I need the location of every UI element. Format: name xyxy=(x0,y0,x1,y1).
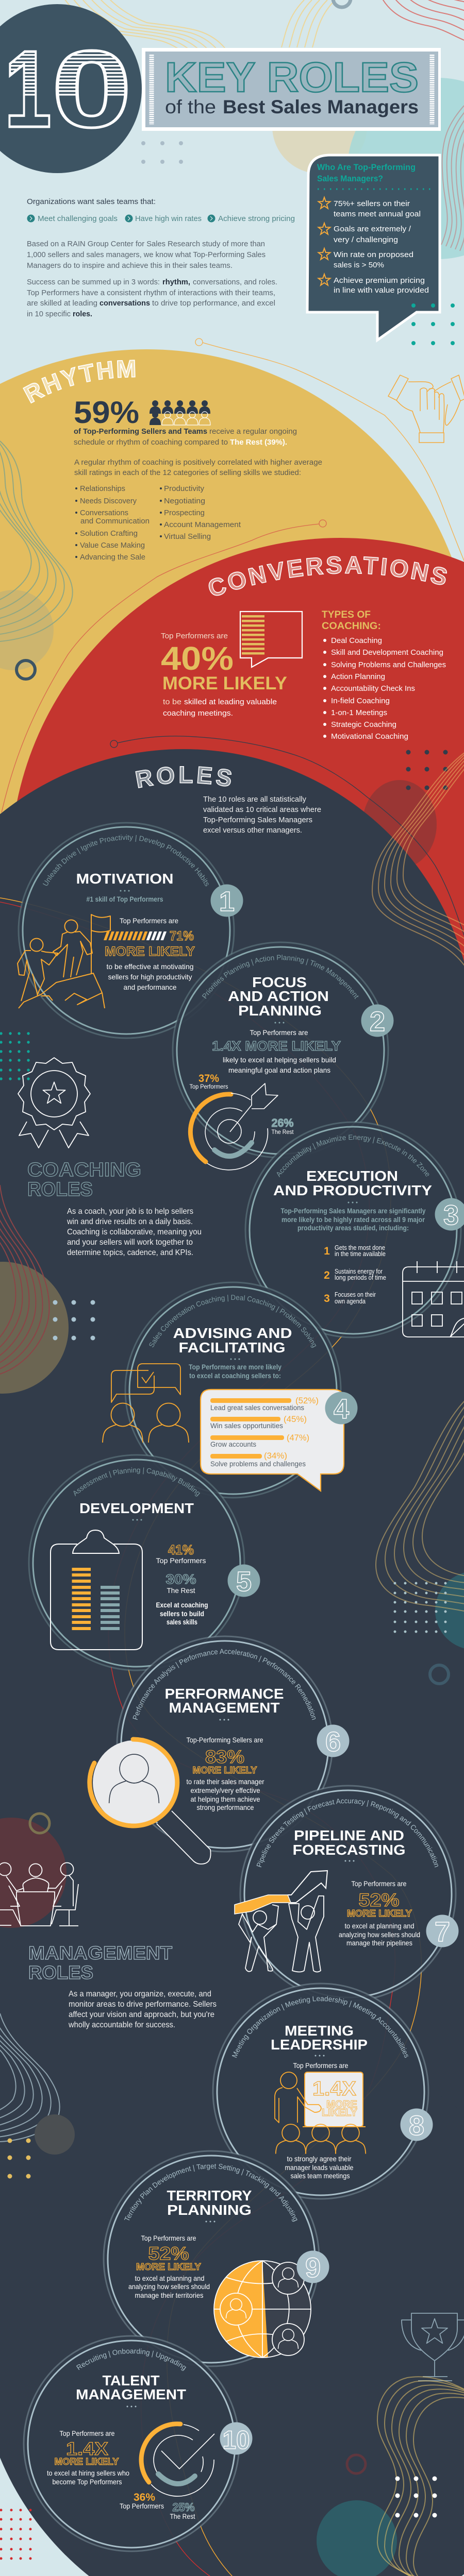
icon: presenter at board with audience: MORE xyxy=(326,2099,357,2110)
management roles heading and text: monitor areas to drive performance. Sellers xyxy=(69,2000,217,2009)
badge 3 xyxy=(435,1198,464,1231)
role 7: pipeline and forecasting: analyzing how sellers should xyxy=(339,1930,420,1939)
role 2: focus and action planning: The Rest xyxy=(271,1128,294,1136)
management roles heading and text: As a manager, you organize, execute, and xyxy=(69,1990,211,1998)
coaching roles heading and text xyxy=(27,1159,202,1257)
role 5: development: The Rest xyxy=(167,1586,195,1595)
types of coaching list: Accountability Check Ins xyxy=(331,684,415,693)
conversations statistic 40%: MORE LIKELY xyxy=(162,673,287,693)
badge 6 xyxy=(317,1725,350,1757)
role 3: execution and productivity xyxy=(273,1134,464,1337)
role 10: talent management: 1.4X xyxy=(66,2439,109,2459)
conversations statistic 40%: Top Performers are xyxy=(161,632,228,640)
roles heading and intro: excel versus other managers. xyxy=(203,826,302,835)
intro text: Have high win rates xyxy=(135,214,202,223)
icon: calendar xyxy=(403,1261,464,1337)
rhythm text and skill lists: Account Management xyxy=(164,520,241,529)
types of coaching list: Action Planning xyxy=(331,672,385,681)
role 9: territory planning xyxy=(124,2164,329,2358)
icon: half orange globe with people xyxy=(214,2261,311,2358)
management roles heading and text: ROLES xyxy=(28,1962,93,1983)
rhythm text and skill lists: Prospecting xyxy=(164,509,205,517)
conversations section background xyxy=(10,538,464,1197)
role 6: performance management: at helping them achieve xyxy=(191,1795,260,1803)
icon: clasped hands xyxy=(388,375,464,443)
role 7: pipeline and forecasting: Pipeline Stress Testing | Forecast Accuracy | Reporting and Communication xyxy=(257,1799,438,1867)
role 2: focus and action planning: Top Performers xyxy=(190,1083,228,1090)
role 3: execution and productivity: Accountability | Maximize Energy | Execute in the Zone xyxy=(276,1134,429,1177)
badge 9 xyxy=(297,2250,329,2283)
role 5: development: Top Performers xyxy=(156,1556,206,1565)
role 6: performance management: Top-Performing Sellers are xyxy=(187,1736,263,1744)
callout: who are top-performing sales managers: sales is > 50% xyxy=(334,261,384,269)
bottom left decoration: red dots, blob and wave xyxy=(0,2509,44,2576)
role 6: performance management: extremely/very effective xyxy=(191,1786,260,1794)
role 4: advising and facilitating: ADVISING AND xyxy=(173,1325,292,1341)
role 4: advising and facilitating: Top Performers are more likely xyxy=(189,1363,281,1371)
types of coaching list: 1-on-1 Meetings xyxy=(331,708,387,717)
management roles heading and text xyxy=(28,1942,217,2029)
icon: clipboard bar chart xyxy=(51,1530,142,1650)
role 7: pipeline and forecasting: PIPELINE AND xyxy=(294,1827,404,1843)
roles heading and intro xyxy=(135,766,321,835)
role 8: meeting leadership xyxy=(232,1996,433,2180)
conversations heading: CONVERSATIONS xyxy=(208,556,447,596)
role 10: talent management: 25% xyxy=(172,2501,195,2514)
panel: coaching bars speech bubble: (45%) xyxy=(284,1414,307,1424)
icon: two people holding rising arrow xyxy=(235,1871,327,1972)
panel: coaching bars speech bubble: Solve problems and challenges xyxy=(210,1460,306,1468)
roles section background xyxy=(0,749,464,2576)
olive wave and blob on rhythm panel xyxy=(0,410,73,679)
role 5: development: Excel at coaching xyxy=(156,1601,208,1609)
role 9: territory planning: PLANNING xyxy=(167,2202,252,2218)
rhythm text and skill lists: Conversations xyxy=(80,509,128,517)
callout: who are top-performing sales managers: Win rate on proposed xyxy=(334,250,413,259)
intro text: roles. xyxy=(73,310,92,318)
icon: presenter at board with audience xyxy=(275,2072,366,2154)
coaching roles heading and text: Coaching is collaborative, meaning you xyxy=(67,1228,202,1236)
rhythm statistic 59%: schedule or rhythm of coaching compared to xyxy=(74,438,228,447)
icon: award medal xyxy=(18,1058,90,1148)
icon: climbers with flag xyxy=(18,914,110,1008)
icon: magnifier with person xyxy=(90,1739,211,1864)
panel: coaching bars speech bubble: (34%) xyxy=(264,1451,287,1461)
roles heading and intro: validated as 10 critical areas where xyxy=(203,805,321,814)
teal dots xyxy=(411,303,455,345)
role 9: territory planning: 52% xyxy=(148,2244,189,2264)
coaching roles heading and text: win and drive results on a daily basis. xyxy=(67,1217,193,1226)
types of coaching list: Deal Coaching xyxy=(331,636,382,645)
rhythm text and skill lists: Solution Crafting xyxy=(80,529,138,538)
panel: coaching bars speech bubble: (52%) xyxy=(295,1396,319,1405)
rhythm text and skill lists: Needs Discovery xyxy=(80,497,137,505)
rhythm text and skill lists: Value Case Making xyxy=(80,541,145,550)
role 8: meeting leadership: Top Performers are xyxy=(293,2061,349,2070)
management roles heading and text: MANAGEMENT xyxy=(28,1942,172,1963)
role 2: focus and action planning: meaningful goal and action plans xyxy=(228,1066,330,1074)
badge 4 xyxy=(325,1392,358,1425)
badge 3: 3 xyxy=(443,1200,459,1231)
role 2: focus and action planning: FOCUS xyxy=(252,974,307,990)
chart: 71% hatched bar xyxy=(104,931,167,940)
types of coaching list: Motivational Coaching xyxy=(331,732,408,741)
types of coaching list: COACHING: xyxy=(322,621,381,632)
role 5: development: 30% xyxy=(166,1571,196,1587)
rhythm text and skill lists: Productivity xyxy=(164,484,204,493)
role 2: focus and action planning: likely to excel at helping sellers build xyxy=(223,1056,336,1064)
rhythm text and skill lists: Negotiating xyxy=(164,497,205,505)
role 5: development: sellers to build xyxy=(160,1610,204,1618)
conversations statistic 40%: 40% xyxy=(161,640,234,677)
callout: who are top-performing sales managers: in line with value provided xyxy=(334,286,429,295)
role 7: pipeline and forecasting xyxy=(234,1799,459,1972)
role 3: execution and productivity: long periods of time xyxy=(335,1274,386,1281)
panel: coaching bars speech bubble: Win sales opportunities xyxy=(210,1421,283,1430)
badge 1 xyxy=(210,884,243,917)
role 8: meeting leadership: to strongly agree their xyxy=(287,2155,352,2163)
role 7: pipeline and forecasting: FORECASTING xyxy=(293,1842,405,1858)
role 2: focus and action planning: Top Performers are xyxy=(250,1028,308,1037)
bottom right decoration: wave, blob, rings and dots xyxy=(317,2377,464,2576)
intro text: to drive top performance, and excel xyxy=(152,299,275,308)
callout: who are top-performing sales managers: Who Are Top-Performing xyxy=(317,162,416,172)
role 2: focus and action planning: 37% xyxy=(198,1073,219,1084)
callout: who are top-performing sales managers: Sales Managers? xyxy=(317,174,383,183)
coaching roles heading and text: ROLES xyxy=(27,1179,93,1200)
intro text: Success can be summed up in 3 words: xyxy=(27,278,160,286)
thin yellow connector arc xyxy=(195,338,464,567)
role 7: pipeline and forecasting: 52% xyxy=(359,1890,399,1910)
role 1: motivation: #1 skill of Top Performers xyxy=(87,895,163,903)
badge 2: 2 xyxy=(370,1006,385,1037)
role 10: talent management: MORE LIKELY xyxy=(55,2456,119,2467)
roles heading and intro: ROLES xyxy=(135,766,232,788)
role 1: motivation: 71% xyxy=(170,929,194,943)
role 10: talent management xyxy=(47,2348,253,2520)
conversations statistic 40% xyxy=(161,632,287,718)
role 1: motivation: sellers for high productivity xyxy=(108,973,192,981)
badge 5 xyxy=(228,1564,260,1597)
role 2: focus and action planning: 1.4X MORE LIKELY xyxy=(212,1038,341,1054)
role 10: talent management: Top Performers are xyxy=(60,2429,115,2437)
intro text: are skilled at leading xyxy=(27,299,97,308)
role 7: pipeline and forecasting: Top Performers are xyxy=(352,1879,407,1888)
role 1: motivation xyxy=(17,835,243,1009)
intro text: Organizations want sales teams that: xyxy=(27,197,156,206)
roles heading and intro: Top-Performing Sales Managers xyxy=(203,816,312,824)
icon: trophy xyxy=(402,2313,464,2381)
intro text: rhythm, xyxy=(162,278,190,286)
rhythm statistic 59%: receive a regular ongoing xyxy=(209,427,297,436)
badge 9: 9 xyxy=(305,2252,321,2283)
big circle with number 10: 0 xyxy=(52,28,132,150)
rhythm text and skill lists: and Communication xyxy=(80,517,150,526)
intro text xyxy=(27,197,295,318)
rhythm text and skill lists xyxy=(74,458,322,562)
thin red connector arc xyxy=(2,520,326,812)
role 3: execution and productivity: 3 xyxy=(324,1293,330,1304)
role 3: execution and productivity: more likely to be highly rated across all 9 major xyxy=(281,1216,425,1224)
role 6: performance management: PERFORMANCE xyxy=(165,1686,284,1702)
role 10: talent management: TALENT xyxy=(102,2372,160,2388)
role 3: execution and productivity: in the time available xyxy=(335,1250,386,1258)
role 6: performance management: to rate their sales manager xyxy=(187,1777,264,1786)
intro text: conversations xyxy=(100,299,150,308)
role 1: motivation: Unleash Drive | Ignite Proactivity | Develop Productive Habits xyxy=(43,835,209,886)
role 9: territory planning: MORE LIKELY xyxy=(136,2262,201,2272)
decorative waves, blobs and dots on roles panel xyxy=(0,736,464,2178)
role 3: execution and productivity: Focuses on their xyxy=(335,1291,376,1298)
callout: who are top-performing sales managers: teams meet annual goal xyxy=(334,210,421,218)
types of coaching list: TYPES OF xyxy=(322,609,371,620)
role 10: talent management: Recruiting | Onboarding | Upgrading xyxy=(76,2348,186,2371)
intro text: Managers do to inspire and achieve this in their sales teams. xyxy=(27,261,233,270)
intro text: Meet challenging goals xyxy=(38,214,118,223)
rhythm statistic 59%: of Top-Performing Sellers and Teams xyxy=(74,427,207,436)
grey dots xyxy=(141,141,183,164)
role 5: development xyxy=(50,1467,260,1650)
role 6: performance management: strong performance xyxy=(197,1803,254,1811)
rhythm statistic 59%: 59% xyxy=(74,395,139,430)
intro text: Achieve strong pricing xyxy=(218,214,295,223)
management roles heading and text: wholly accountable for success. xyxy=(68,2021,175,2029)
role 2: focus and action planning: Priorities Planning | Action Planning | Time Management xyxy=(202,955,359,999)
callout: who are top-performing sales managers: very / challenging xyxy=(334,235,398,244)
rhythm heading: RHYTHM xyxy=(23,360,136,404)
role 1: motivation: and performance xyxy=(124,983,177,991)
rhythm text and skill lists: Virtual Selling xyxy=(164,532,211,541)
rhythm text and skill lists: Advancing the Sale xyxy=(80,553,145,562)
intro text: in 10 specific xyxy=(27,310,71,318)
role 7: pipeline and forecasting: to excel at planning and xyxy=(344,1922,415,1930)
badge 7 xyxy=(426,1914,459,1947)
icon: presenter at board with audience: 1.4X xyxy=(312,2078,356,2100)
role 8: meeting leadership: sales team meetings xyxy=(291,2172,350,2180)
role 3: execution and productivity: 1 xyxy=(324,1245,330,1257)
icon: presenter at board with audience: LIKELY xyxy=(322,2107,358,2119)
conversations statistic 40%: skilled at leading valuable xyxy=(184,698,277,706)
role 1: motivation: to be effective at motivating xyxy=(106,962,194,971)
conversations statistic 40%: coaching meetings. xyxy=(163,709,233,718)
role 10: talent management: MANAGEMENT xyxy=(76,2386,186,2402)
title banner: Best Sales Managers xyxy=(223,96,419,117)
role 9: territory planning: Territory Plan Development | Target Setting | Tracking and Adjusting xyxy=(124,2164,297,2222)
callout: who are top-performing sales managers: Goals are extremely / xyxy=(334,225,411,233)
badge 10: 10 xyxy=(223,2426,250,2454)
role 6: performance management: Performance Analysis | Performance Acceleration | Performance Remediation xyxy=(132,1649,316,1720)
title banner: of the xyxy=(165,96,216,117)
role 9: territory planning: manage their territories xyxy=(135,2291,203,2299)
role 3: execution and productivity: Sustains energy for xyxy=(335,1268,383,1275)
panel: coaching bars speech bubble: Lead great sales conversations xyxy=(210,1403,304,1412)
role 4: advising and facilitating: Sales Conversation Coaching | Deal Coaching | Problem Solving xyxy=(150,1295,317,1348)
intro text: Based on a RAIN Group Center for Sales Research study of more than xyxy=(27,240,265,248)
role 8: meeting leadership: Meeting Organization | Meeting Leadership | Meeting Accountabilities xyxy=(232,1996,408,2058)
role 5: development: Assessment | Planning | Capability Building xyxy=(73,1467,200,1497)
management roles heading and text: affect your vision and approach, but you're xyxy=(69,2010,214,2019)
roles heading and intro: The 10 roles are all statistically xyxy=(203,795,306,804)
types of coaching list xyxy=(322,609,446,741)
rhythm text and skill lists: skill ratings in each of the 12 categories of selling skills we studied: xyxy=(74,468,301,477)
callout: who are top-performing sales managers xyxy=(307,155,440,340)
role 3: execution and productivity: productivity areas studied, including: xyxy=(297,1224,409,1232)
role 10: talent management: Top Performers xyxy=(120,2502,164,2510)
role 3: execution and productivity: 2 xyxy=(324,1269,330,1281)
big circle with number 10: 0 xyxy=(52,28,132,150)
title banner xyxy=(142,48,441,131)
role 10: talent management: to excel at hiring sellers who xyxy=(47,2469,129,2477)
role 2: focus and action planning xyxy=(188,955,394,1171)
role 8: meeting leadership: manager leads valuable xyxy=(285,2163,354,2172)
role 2: focus and action planning: 26% xyxy=(271,1116,294,1129)
coaching roles heading and text: determine topics, cadence, and KPIs. xyxy=(67,1248,193,1257)
panel: coaching bars speech bubble xyxy=(201,1389,344,1491)
role 7: pipeline and forecasting: MORE LIKELY xyxy=(347,1908,412,1919)
types of coaching list: In-field Coaching xyxy=(331,697,390,705)
types of coaching list: Solving Problems and Challenges xyxy=(331,660,446,669)
intro text: 1,000 sellers and sales managers, we know what Top-Performing Sales xyxy=(27,250,266,259)
role 5: development: DEVELOPMENT xyxy=(79,1500,194,1516)
icon: striped speech bubble xyxy=(240,612,302,667)
icon: chat bubbles and two people xyxy=(103,1364,189,1443)
types of coaching list: Strategic Coaching xyxy=(331,720,396,729)
role 10: talent management: become Top Performers xyxy=(53,2478,122,2486)
intro text: conversations, and roles. xyxy=(193,278,277,286)
badge 1: 1 xyxy=(219,886,235,917)
badge 4: 4 xyxy=(334,1394,349,1425)
role 6: performance management: MANAGEMENT xyxy=(169,1700,279,1716)
title banner: KEY ROLES xyxy=(165,54,419,101)
role 10: talent management: The Rest xyxy=(170,2512,195,2520)
role 4: advising and facilitating: to excel at coaching sellers to: xyxy=(189,1371,281,1380)
role 5: development: 41% xyxy=(168,1542,194,1557)
big circle with number 10: 1 xyxy=(4,28,52,150)
icon: target chart xyxy=(190,1083,278,1170)
role 8: meeting leadership: LEADERSHIP xyxy=(271,2037,368,2053)
role rings 1 to 10 xyxy=(19,823,461,2551)
role 10: talent management: 36% xyxy=(134,2492,155,2503)
big circle with number 10 xyxy=(0,4,142,173)
conversations statistic 40%: to be xyxy=(163,698,181,706)
big circle with number 10: 1 xyxy=(4,28,52,150)
long thin orange and red arcs through the roles circles xyxy=(0,897,464,2576)
role 6: performance management: 83% xyxy=(205,1747,244,1767)
coaching roles heading and text: and your sellers will work together to xyxy=(67,1238,193,1247)
role 9: territory planning: Top Performers are xyxy=(141,2234,196,2242)
role 9: territory planning: to excel at planning and xyxy=(135,2274,204,2282)
icon: meeting around table xyxy=(0,1863,78,1926)
rhythm statistic 59% xyxy=(74,395,297,447)
role 1: motivation: Top Performers are xyxy=(120,917,178,925)
role 4: advising and facilitating: FACILITATING xyxy=(178,1340,286,1355)
badge 5: 5 xyxy=(236,1566,252,1597)
rhythm text and skill lists: A regular rhythm of coaching is positively correlated with higher average xyxy=(74,458,322,467)
badge 8 xyxy=(400,2108,433,2141)
badge 7: 7 xyxy=(435,1917,450,1947)
panel: coaching bars speech bubble: (47%) xyxy=(287,1433,309,1443)
role 9: territory planning: TERRITORY xyxy=(167,2188,252,2204)
badge 6: 6 xyxy=(325,1726,341,1757)
role 4: advising and facilitating xyxy=(102,1295,358,1492)
role 7: pipeline and forecasting: manage their pipelines xyxy=(346,1939,412,1947)
coaching roles heading and text: COACHING xyxy=(27,1159,141,1181)
role 6: performance management xyxy=(87,1649,350,1865)
role 8: meeting leadership: MEETING xyxy=(285,2023,354,2039)
role 2: focus and action planning: AND ACTION xyxy=(228,988,329,1004)
callout: who are top-performing sales managers: Achieve premium pricing xyxy=(334,276,425,285)
badge 2 xyxy=(361,1005,394,1037)
types of coaching list: Skill and Development Coaching xyxy=(331,648,443,657)
role 1: motivation: MOTIVATION xyxy=(76,871,173,887)
callout: who are top-performing sales managers: 75%+ sellers on their xyxy=(334,199,410,208)
darker blob, dots and thin arc on red panel xyxy=(110,736,464,943)
role 3: execution and productivity: Gets the most done xyxy=(335,1244,385,1251)
role 9: territory planning: analyzing how sellers should xyxy=(128,2282,210,2291)
role 3: execution and productivity: own agenda xyxy=(335,1298,366,1305)
role 1: motivation: MORE LIKELY xyxy=(105,944,195,959)
rhythm section background xyxy=(0,349,464,993)
rhythm text and skill lists: Relationships xyxy=(80,484,125,493)
chart: gauge with check mark xyxy=(141,2424,214,2496)
rhythm statistic 59%: The Rest (39%). xyxy=(230,438,287,447)
coaching roles heading and text: As a coach, your job is to help sellers xyxy=(67,1207,193,1216)
panel: coaching bars speech bubble: Grow accounts xyxy=(210,1440,256,1448)
role 3: execution and productivity: AND PRODUCTIVITY xyxy=(273,1182,432,1198)
header decoration: blobs, waves and ring xyxy=(62,0,464,259)
role 3: execution and productivity: EXECUTION xyxy=(306,1168,398,1184)
role 6: performance management: MORE LIKELY xyxy=(193,1765,257,1775)
intro text: Top Performers have a consistent rhythm of interactions with their teams, xyxy=(27,289,275,297)
role 2: focus and action planning: PLANNING xyxy=(238,1003,322,1019)
role 5: development: sales skills xyxy=(167,1618,197,1626)
badge 8: 8 xyxy=(409,2110,424,2141)
role 3: execution and productivity: Top-Performing Sales Managers are significantly xyxy=(280,1207,426,1215)
